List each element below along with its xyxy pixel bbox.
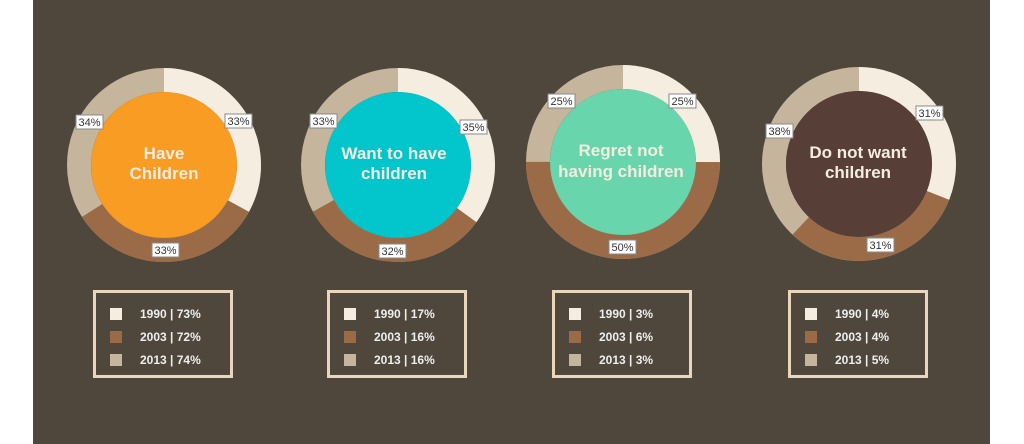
legend: want to have children: 1990 | 17% <box>374 307 435 321</box>
chart: regret not having children <box>538 77 708 254</box>
chart: have children: 33% <box>227 116 250 128</box>
chart: do not want children: children <box>825 163 891 182</box>
legend: have children: 2003 | 72% <box>140 330 201 344</box>
legend: regret not having children: 2013 | 3% <box>599 353 653 367</box>
legend: do not want children: 2013 | 5% <box>835 353 889 367</box>
legend: have children: 2013 | 74% <box>140 353 201 367</box>
legend: want to have children: 2003 | 16% <box>374 330 435 344</box>
chart: do not want children: 38% <box>768 126 791 138</box>
chart: want to have children: 32% <box>381 246 404 258</box>
chart: want to have children: 33% <box>312 116 335 128</box>
chart: want to have children: children <box>361 164 427 183</box>
chart: have children <box>76 80 252 257</box>
legend: regret not having children: 1990 | 3% <box>599 307 653 321</box>
legend: do not want children <box>788 290 928 378</box>
chart: have children: 33% <box>154 245 177 257</box>
legend: regret not having children <box>552 290 692 378</box>
chart: regret not having children: 25% <box>550 96 573 108</box>
chart: regret not having children: 25% <box>671 96 694 108</box>
chart: do not want children <box>766 79 944 252</box>
chart: have children: Children <box>130 164 198 183</box>
chart: want to have children: Want to have <box>341 144 447 163</box>
legend: do not want children: 1990 | 4% <box>835 307 889 321</box>
chart: do not want children: Do not want <box>809 143 907 162</box>
legend: want to have children <box>327 290 467 378</box>
legend: have children <box>93 290 233 378</box>
legend: want to have children: 2013 | 16% <box>374 353 435 367</box>
legend: do not want children: 2003 | 4% <box>835 330 889 344</box>
chart: want to have children <box>310 80 487 258</box>
chart: do not want children: 31% <box>869 240 892 252</box>
chart: do not want children: 31% <box>918 108 941 120</box>
chart: have children: 34% <box>78 117 101 129</box>
chart: regret not having children: having children <box>558 162 684 181</box>
chart: want to have children: 35% <box>462 122 485 134</box>
chart: regret not having children: Regret not <box>578 141 664 160</box>
legend: regret not having children: 2003 | 6% <box>599 330 653 344</box>
legend: have children: 1990 | 73% <box>140 307 201 321</box>
chart: regret not having children: 50% <box>611 242 634 254</box>
chart: have children: Have <box>144 144 184 163</box>
